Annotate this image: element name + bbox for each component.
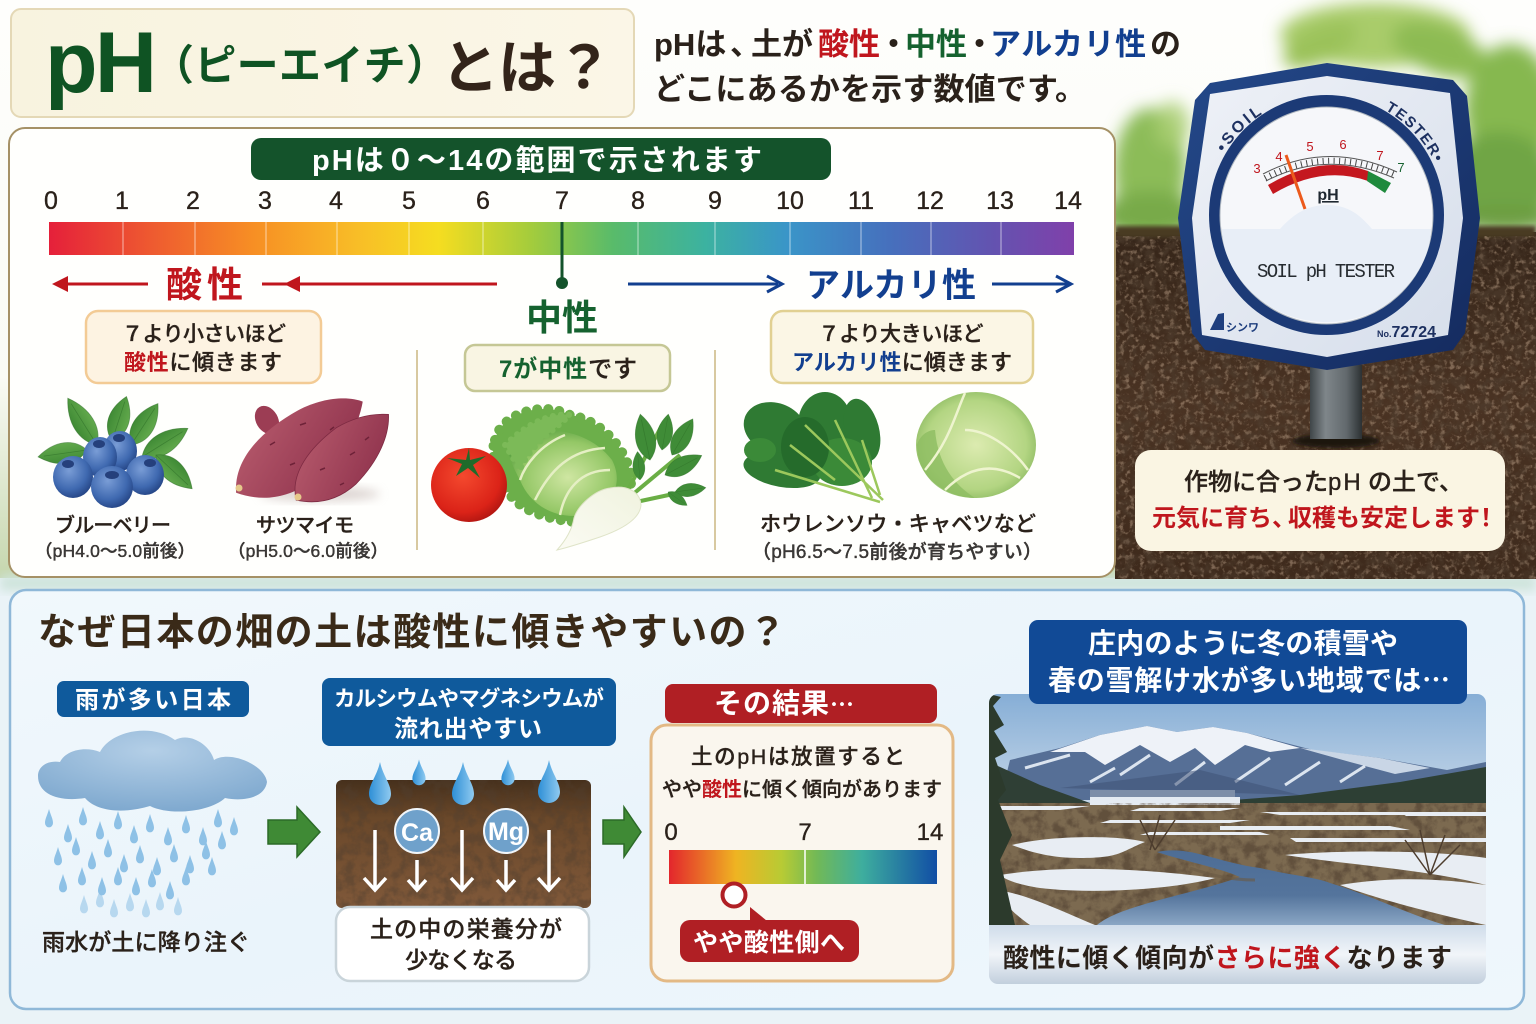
acid heading with arrows — [52, 264, 497, 305]
acid note — [86, 311, 321, 383]
stem — [1292, 365, 1380, 448]
result box: 土のpHは放置すると — [691, 745, 905, 769]
scale numbers: 10 — [776, 187, 804, 215]
photo heading pill: 春の雪解け水が多い地域では… — [1048, 659, 1450, 699]
result pill: その結果… — [714, 685, 855, 720]
column dividers — [417, 350, 715, 550]
alkaline note: アルカリ性に傾きます — [792, 350, 1012, 375]
scale numbers: 13 — [986, 187, 1014, 215]
icon: cabbage — [916, 392, 1036, 498]
title box: pH — [45, 15, 157, 111]
callout: crop-matched soil: ！ — [1474, 505, 1498, 532]
icon: tomato — [431, 448, 507, 522]
model number: No.72724 — [1377, 324, 1436, 341]
panel: pH scale and crops — [9, 128, 1115, 577]
scale numbers: 5 — [402, 187, 416, 215]
neutral note: 7が中性です — [499, 355, 637, 383]
icon: blueberries — [37, 393, 199, 508]
mini scale bar — [669, 850, 937, 884]
result pill — [665, 684, 937, 723]
dial tick band — [1263, 156, 1397, 181]
scale numbers: 6 — [476, 187, 490, 215]
title box: とは？ — [441, 36, 613, 101]
Mg ion: Mg — [488, 818, 524, 846]
blurred lettuce backdrop — [1102, 3, 1536, 239]
SOIL pH TESTER label: SOIL pH TESTER — [1257, 261, 1395, 283]
intro text: どこにあるかを示す数値です。 — [654, 72, 1086, 107]
dial numbers: 3 — [1253, 161, 1261, 176]
alkaline heading with arrows — [628, 267, 1071, 305]
intro text: の — [1150, 27, 1181, 62]
label: sweet potato: （pH5.0～6.0前後） — [228, 541, 388, 561]
photo: soil tester in the field — [1109, 0, 1536, 579]
photo: snowy Shonai landscape — [989, 694, 1486, 984]
photo heading pill: 庄内のように冬の積雪や — [1088, 628, 1398, 659]
label: spinach and cabbage — [752, 513, 1042, 563]
intro text: 中性 — [905, 27, 967, 62]
intro text: ・ — [964, 27, 995, 62]
scale numbers: 12 — [916, 187, 944, 215]
dial numbers: 7 — [1397, 160, 1405, 175]
mini scale numbers — [664, 819, 943, 846]
dial numbers: 4 — [1275, 149, 1283, 164]
heading pill — [251, 138, 831, 180]
label: sweet potato — [228, 515, 388, 561]
TESTER arc text: TESTER• — [1388, 101, 1440, 160]
SOIL arc text: •SOIL — [1219, 108, 1262, 150]
pH label on dial: pH — [1317, 187, 1339, 204]
Mg ion — [484, 809, 528, 853]
neutral heading: 中性 — [526, 297, 598, 338]
mini scale numbers: 14 — [917, 819, 943, 846]
callout: crop-matched soil: 元気に育ち — [1152, 505, 1272, 532]
callout: crop-matched soil — [1135, 450, 1505, 551]
caption box: nutrients decline: 少なくなる — [405, 947, 517, 973]
meter body — [1178, 63, 1480, 370]
icon: daikon — [557, 412, 707, 550]
label: sweet potato: サツマイモ — [256, 515, 354, 537]
alkaline note — [771, 311, 1033, 383]
icon: lettuce — [493, 409, 632, 523]
panel: why Japanese soil tends to be acidic — [10, 590, 1524, 1009]
scale numbers — [44, 187, 1082, 215]
scale numbers: 7 — [555, 187, 569, 215]
label: spinach and cabbage: （pH6.5～7.5前後が育ちやすい） — [752, 541, 1042, 563]
scale numbers: 14 — [1054, 187, 1082, 215]
soil cross-section — [336, 759, 591, 908]
scale numbers: 11 — [848, 187, 874, 215]
caption box: nutrients decline: 土の中の栄養分が — [370, 916, 562, 942]
neutral marker — [556, 222, 568, 289]
icon: rain cloud — [38, 731, 267, 917]
dial arc red — [1268, 165, 1368, 194]
arrow 2 — [603, 807, 641, 857]
callout: toward acidic — [680, 907, 859, 962]
label: spinach and cabbage: ホウレンソウ・キャベツなど — [760, 513, 1036, 536]
dial numbers: 6 — [1339, 137, 1347, 152]
scale numbers: 1 — [115, 187, 129, 215]
callout: crop-matched soil: pH — [1328, 469, 1363, 496]
heading pill: pHは０～14の範囲で示されます — [312, 144, 762, 177]
callout: crop-matched soil: の土で、 — [1368, 469, 1463, 496]
acid note: 酸性に傾きます — [124, 350, 282, 375]
callout: toward acidic: やや酸性側へ — [693, 929, 845, 957]
intro text — [654, 27, 1181, 107]
alkaline note: ７より大きいほど — [818, 323, 984, 346]
intro text: ・ — [878, 27, 909, 62]
intro text: 酸性 — [818, 27, 880, 62]
caption box: nutrients decline — [336, 907, 589, 981]
callout: crop-matched soil: 、 — [1272, 505, 1296, 532]
scale numbers: 8 — [631, 187, 645, 215]
icon: sweet potatoes — [217, 376, 409, 521]
mini scale numbers: 7 — [798, 819, 812, 846]
Ca ion: Ca — [401, 819, 434, 847]
arrow 1 — [268, 807, 320, 857]
scale numbers: 2 — [186, 187, 200, 215]
soil ground — [1115, 232, 1536, 579]
scale numbers: 3 — [258, 187, 272, 215]
step 1 pill: 雨が多い日本 — [75, 686, 231, 714]
position marker — [722, 884, 746, 906]
icon: spinach — [736, 392, 887, 502]
intro text: アルカリ性 — [990, 27, 1147, 62]
intro text: 、 — [730, 27, 761, 62]
title box — [11, 9, 634, 117]
rainbow scale bar — [49, 222, 1074, 255]
label: blueberry: （pH4.0～5.0前後） — [35, 541, 195, 561]
scale numbers: 4 — [329, 187, 343, 215]
callout: crop-matched soil: 収穫も安定します — [1288, 505, 1480, 532]
mini scale numbers: 0 — [664, 819, 678, 846]
needle — [1286, 155, 1305, 209]
Ca ion — [395, 809, 439, 853]
step 2 pill — [322, 678, 616, 746]
acid note: ７より小さいほど — [122, 323, 286, 346]
result box — [651, 725, 953, 981]
intro text: pHは — [654, 27, 726, 62]
callout: crop-matched soil: 作物に合った — [1184, 469, 1328, 496]
intro text: 土が — [751, 27, 813, 62]
dial numbers: 5 — [1306, 139, 1314, 154]
neutral note — [465, 345, 670, 391]
scale numbers: 0 — [44, 187, 58, 215]
scale numbers: 9 — [708, 187, 722, 215]
step 2 pill: カルシウムやマグネシウムが — [334, 686, 604, 711]
photo caption: 酸性に傾く傾向がさらに強くなります — [1003, 943, 1452, 973]
brand mark: シンワ — [1226, 322, 1259, 334]
caption: rain: 雨水が土に降り注ぐ — [42, 929, 250, 955]
brand mark — [1210, 313, 1259, 334]
photo heading pill — [1029, 620, 1467, 704]
title box: （ピーエイチ） — [152, 42, 448, 89]
water drops — [369, 759, 560, 805]
alkaline heading with arrows: アルカリ性 — [806, 267, 976, 305]
step 2 pill: 流れ出やすい — [394, 716, 542, 743]
heading: なぜ日本の畑の土は酸性に傾きやすいの？ — [38, 612, 786, 654]
step 1 pill — [57, 681, 249, 717]
dial arc green — [1367, 171, 1391, 193]
label: blueberry: ブルーベリー — [55, 513, 171, 537]
dial numbers — [1253, 137, 1405, 176]
dial numbers: 7 — [1376, 148, 1384, 163]
acid heading with arrows: 酸性 — [166, 264, 243, 305]
white flow arrows — [364, 830, 560, 890]
label: blueberry — [35, 513, 195, 561]
result box: やや酸性に傾く傾向があります — [662, 778, 942, 801]
